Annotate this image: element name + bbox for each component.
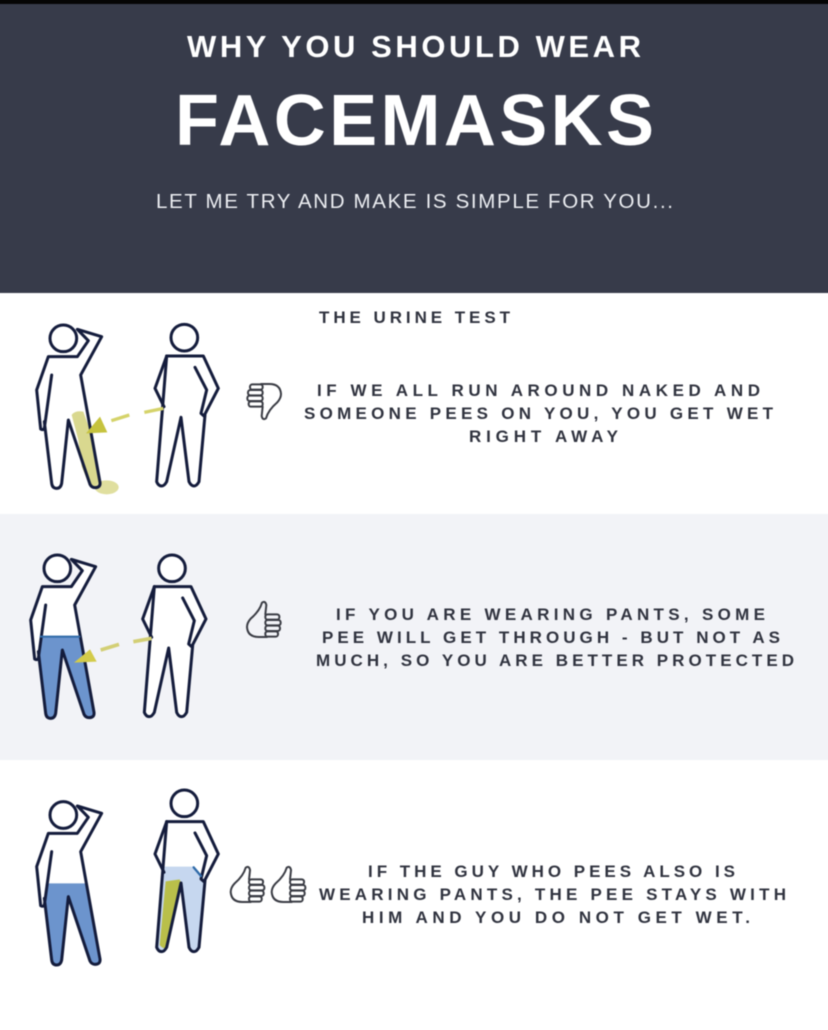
text block: naked: IF WE ALL RUN AROUND NAKED AND bbox=[317, 381, 760, 400]
text block: pants: MUCH, SO YOU ARE BETTER PROTECTED bbox=[316, 651, 794, 670]
arrow: pee stream bbox=[74, 638, 152, 663]
panel: one wearing pants bbox=[0, 514, 828, 760]
text block: pants: PEE WILL GET THROUGH - BUT NOT AS bbox=[322, 628, 780, 647]
icon: thumbs down bbox=[247, 384, 281, 419]
icon: thumbs up bbox=[247, 602, 281, 637]
text block: naked: SOMEONE PEES ON YOU, YOU GET WET bbox=[304, 404, 774, 423]
figure: person peeing bbox=[143, 555, 206, 717]
section heading: the urine test: THE URINE TEST bbox=[319, 308, 511, 327]
figures: both naked bbox=[37, 324, 218, 494]
figures: both in pants bbox=[37, 790, 218, 965]
arrow: pee stream bbox=[86, 408, 163, 433]
text block: naked: RIGHT AWAY bbox=[469, 427, 619, 446]
text block: naked bbox=[304, 381, 774, 446]
figure: person peeing bbox=[155, 324, 218, 486]
figure: person being peed on bbox=[37, 325, 119, 494]
figure: person wearing blue pants bbox=[37, 802, 102, 965]
text block: both pants: WEARING PANTS, THE PEE STAYS WITH bbox=[319, 885, 786, 904]
panel: both wearing pants bbox=[0, 760, 828, 1030]
header panel bbox=[0, 0, 828, 293]
text block: pants: IF YOU ARE WEARING PANTS, SOME bbox=[336, 605, 765, 624]
figure: person peeing inside pants bbox=[155, 790, 218, 952]
title: facemasks: FACEMASKS bbox=[175, 81, 654, 161]
heading: why you should wear: WHY YOU SHOULD WEAR bbox=[187, 29, 641, 64]
figures: one in pants bbox=[31, 555, 206, 718]
text block: both pants: IF THE GUY WHO PEES ALSO IS bbox=[368, 862, 735, 881]
icon: two thumbs up bbox=[231, 867, 305, 902]
subtitle: LET ME TRY AND MAKE IS SIMPLE FOR YOU... bbox=[156, 190, 673, 213]
panel: naked bbox=[0, 293, 828, 514]
text block: both pants bbox=[319, 862, 786, 927]
text block: both pants: HIM AND YOU DO NOT GET WET. bbox=[362, 908, 750, 927]
figure: person wearing blue pants bbox=[31, 555, 96, 718]
text block: pants bbox=[316, 605, 794, 670]
